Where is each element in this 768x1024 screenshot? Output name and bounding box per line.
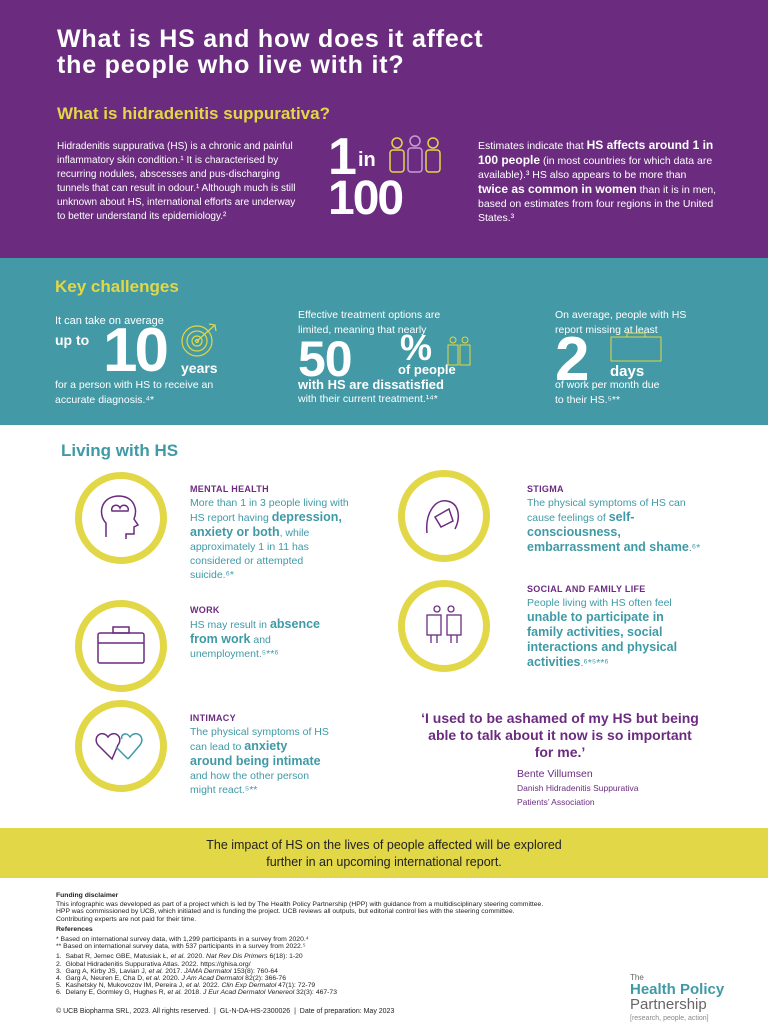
icon: intimacy [75,700,167,792]
icon: stigma [398,470,490,562]
banner: upcoming report [0,828,768,878]
footer: disclaimer and references: References [56,926,93,933]
stat: 10 years [55,315,218,406]
title: What is HS and how does it affect [57,25,483,53]
block: mental health: MENTAL HEALTH [190,484,269,494]
quote: Bente Villumsen [517,768,593,780]
quote: Danish Hidradenitis Suppurativa [517,783,638,793]
block: social: People living with HS often feel unable to participate in family activities, social interactions and physical activities.⁶*⁵**⁶ [527,597,677,669]
quote: ‘I used to be ashamed of my HS but being able to talk about it now is so important for me.’ [421,710,699,760]
block: mental health: More than 1 in 3 people living with HS report having depression, anxiety or both, while approximately 1 in 11 has considered or attempted suicide.⁶* [190,497,349,581]
stat: 50%: 50 [298,331,352,387]
footer: disclaimer and references: 5. Kashetsky N, Mukovozov IM, Pereira J, et al. 2022. Clin Exp Dermatol 47(1): 72-79 [56,982,315,989]
stat: 1 in 100: 100 [328,172,402,225]
panel: header purple [0,0,768,258]
stat: 1 in 100 [328,128,441,225]
stat: 50%: % [400,327,432,368]
heading: living with HS: Living with HS [61,441,178,460]
stat: 50%: of people [398,362,456,377]
block: stigma: The physical symptoms of HS can cause feelings of self-consciousness, embarrassment and shame.⁶* [527,497,700,554]
icon: briefcase [610,332,662,362]
block: intimacy: INTIMACY [190,713,236,723]
icon: work [75,600,167,692]
stat: 2 days: of work per month due to their HS.⁵** [555,379,659,406]
title [57,25,483,79]
icon: social [398,580,490,672]
stat: 50% [298,309,470,405]
logo: Health Policy Partnership: The [630,973,644,982]
stat: 2 days: On average, people with HS report missing at least [555,309,686,336]
footer: disclaimer and references [56,892,543,996]
text: estimates: Estimates indicate that HS affects around 1 in 100 people (in most countries for which data are available).³ HS also appears to be more than twice as common in women than it is in men, based on estimates from four regions in the United States.³ [478,138,716,224]
footer: disclaimer and references: 1. Sabat R, Jemec GBE, Matusiak Ł, et al. 2020. Nat Rev Dis Primers 6(18): 1-20 [56,953,303,960]
footer: copyright: © UCB Biopharma SRL, 2023. All rights reserved. | GL-N-DA-HS-2300026 | Date of preparation: May 2023 [56,1008,394,1015]
icon: two people [448,336,470,366]
text: definition: Hidradenitis suppurativa (HS) is a chronic and painful inflammatory skin condition.¹ It is characterised by recurring nodules, abscesses and pus-discharging tunnels that can result in odour.¹ Although much is still unknown about HS, international efforts are underway to better understand its epidemiology.² [57,141,295,222]
logo: Health Policy Partnership: [research, people, action] [630,1015,709,1022]
footer: disclaimer and references: 2. Global Hidradenitis Suppurativa Atlas. 2022. https://ghisa.org/ [56,961,251,968]
stat: 10 years: up to [55,332,89,348]
banner: upcoming report: The impact of HS on the lives of people affected will be explored [206,838,562,852]
icon: mental health [75,472,167,564]
stat: 2 days [555,309,686,406]
logo: Health Policy Partnership [630,973,724,1022]
icon: target [181,323,217,357]
stat: 10 years: for a person with HS to receive an accurate diagnosis.⁴* [55,379,213,406]
footer: disclaimer and references: * Based on international survey data, with 1,299 participants in a survey from 2020.⁴ [56,936,309,943]
footer: disclaimer and references: This infographic was developed as part of a project which is led by The Health Policy Partnership (HPP) with guidance from a multidisciplinary steering committee. HPP was commissioned by UCB, which initiated and is funding the project. UCB reviews all outputs, but editorial control lies with the steering committee. Contributing experts are not paid for their time. [56,901,543,923]
stat: 1 in 100: 1 [328,128,357,186]
block: intimacy: The physical symptoms of HS can lead to anxiety around being intimate and how the other person might react.⁵** [190,726,329,796]
logo: Health Policy Partnership: Partnership [630,996,707,1013]
banner: upcoming report: further in an upcoming international report. [266,855,502,869]
footer: disclaimer and references: Funding disclaimer [56,892,118,899]
stat: 50%: with HS are dissatisfied [298,377,444,392]
block: stigma: STIGMA [527,484,564,494]
panel: key challenges [0,258,768,425]
heading: Key challenges [55,277,179,296]
quote [421,710,699,807]
footer: disclaimer and references: 4. Garg A, Neuren E, Cha D, et al. 2020. J Am Acad Dermatol 82(2): 366-76 [56,975,286,982]
stat: 10 years: It can take on average [55,315,164,327]
icon: people [389,135,441,173]
stat: 10 years: 10 [103,316,166,385]
stat: 50%: with their current treatment.¹⁴* [298,393,438,405]
footer: disclaimer and references: ** Based on international survey data, with 537 participants in a survey from 2022.⁵ [56,943,306,950]
stat: 50%: Effective treatment options are limited, meaning that nearly [298,309,440,336]
text: Patients’ Association [517,797,595,807]
title: the people who live with it? [57,51,404,79]
block: work: HS may result in absence from work and unemployment.⁵**⁶ [190,617,320,660]
stat: 2 days: 2 [555,325,589,394]
block: social: SOCIAL AND FAMILY LIFE [527,584,646,594]
footer: disclaimer and references: 6. Delany E, Gormley G, Hughes R, et al. 2018. J Eur Acad Dermatol Venereol 32(3): 467-73 [56,989,337,996]
footer: disclaimer and references: 3. Garg A, Kirby JS, Lavian J, et al. 2017. JAMA Dermatol 153(8): 760-64 [56,968,278,975]
subheading: What is hidradenitis suppurativa? [57,104,330,123]
logo: Health Policy Partnership: Health Policy [630,981,724,998]
stat: 1 in 100: in [358,149,376,171]
stat: 10 years: years [181,360,218,376]
block: work: WORK [190,605,220,615]
stat: 2 days: days [610,363,644,380]
